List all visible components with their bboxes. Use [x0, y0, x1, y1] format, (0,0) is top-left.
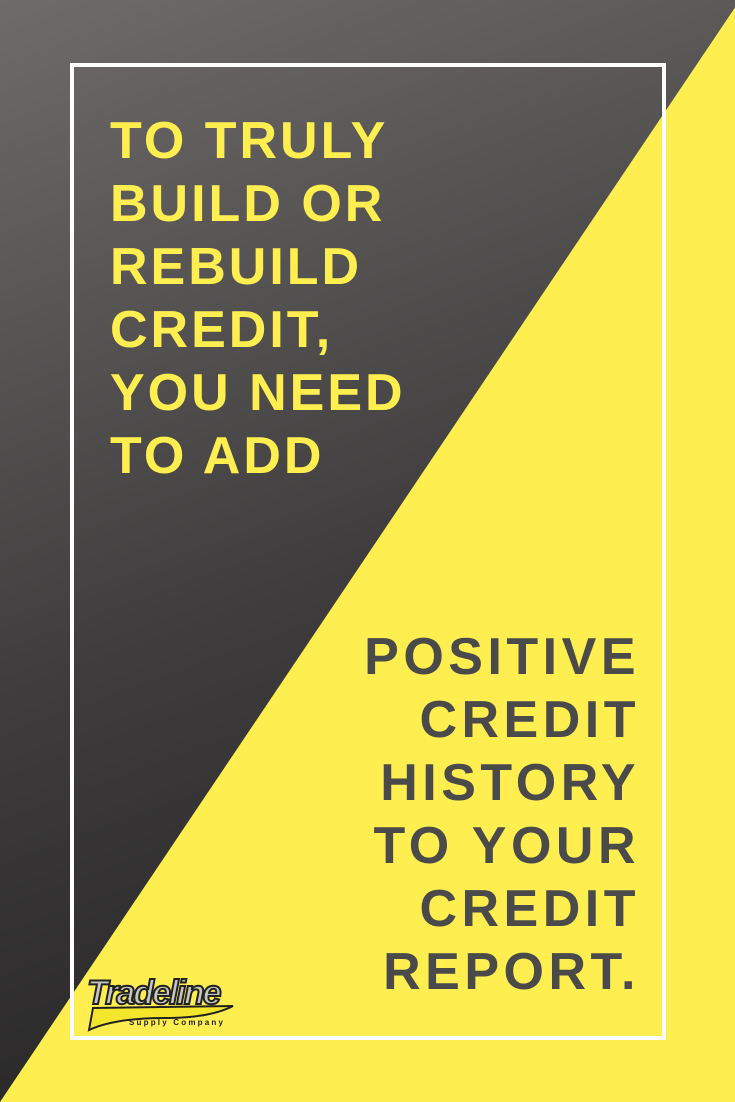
heading: bottom dark text: REPORT.: [383, 943, 640, 1001]
heading: top yellow text: REBUILD: [110, 238, 362, 296]
heading: bottom dark text: TO YOUR: [373, 817, 640, 875]
heading: bottom dark text: CREDIT: [419, 880, 640, 938]
heading: top yellow text: [110, 112, 406, 485]
heading: bottom dark text: CREDIT: [419, 691, 640, 749]
heading: top yellow text: YOU NEED: [110, 364, 406, 422]
heading: top yellow text: TO ADD: [110, 427, 324, 485]
heading: top yellow text: TO TRULY: [110, 112, 388, 170]
logo: Tradeline Supply Company: Tradeline: [87, 974, 220, 1012]
logo: Tradeline Supply Company: [87, 974, 234, 1032]
white frame: [70, 63, 666, 1040]
logo: Tradeline Supply Company: Supply Company: [129, 1018, 225, 1027]
heading: top yellow text: CREDIT,: [110, 301, 333, 359]
heading: top yellow text: BUILD OR: [110, 175, 385, 233]
heading: bottom dark text: POSITIVE: [364, 628, 640, 686]
heading: bottom dark text: [364, 628, 640, 1001]
heading: bottom dark text: HISTORY: [380, 754, 640, 812]
